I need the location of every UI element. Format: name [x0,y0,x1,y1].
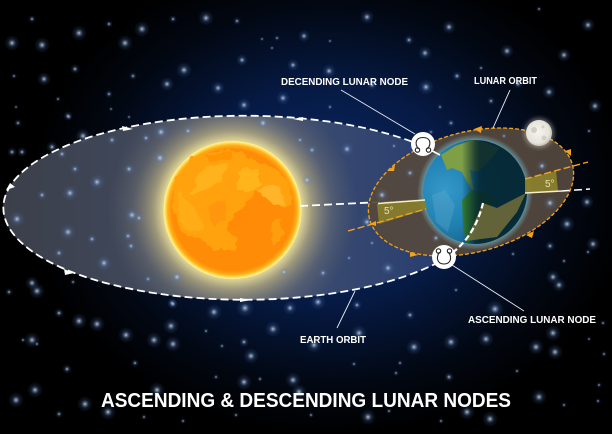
label: ascending lunar node: ASCENDING LUNAR NODE [468,315,596,326]
sun [164,141,302,279]
label: earth orbit: EARTH ORBIT [300,335,366,346]
continents [432,139,500,244]
tilted lunar plane dashed lines [348,162,588,231]
5 degree wedge left [377,200,427,224]
earth [417,134,533,250]
arrows: lunar orbit direction [370,126,571,257]
earth orbit plane [3,116,434,300]
arrows: earth orbit direction [6,117,303,302]
star glints in lunar orbit [375,133,557,243]
ascending node symbol [432,245,456,269]
earth orbit dashed path [3,116,445,302]
leader lines [337,90,524,328]
sun surface patches [172,151,293,250]
ecliptic plane white lines [378,146,590,204]
descending node symbol [411,132,435,156]
label: lunar orbit: LUNAR ORBIT [474,76,537,87]
label: descending lunar node: DECENDING LUNAR NODE [281,77,408,88]
title: ASCENDING & DESCENDING LUNAR NODES [101,390,511,412]
5 degree wedge right [525,171,558,193]
lunar orbit dashed path [354,107,588,277]
5 degree wedge right: 5° [545,179,555,190]
night side [463,140,527,244]
lunar orbit disc [354,107,588,277]
moon [524,118,554,148]
orbit plane overlay on earth [466,193,526,241]
5 degree wedge left: 5° [384,206,394,217]
sun to earth line [300,200,425,206]
earth orbit front dashes [445,203,483,258]
